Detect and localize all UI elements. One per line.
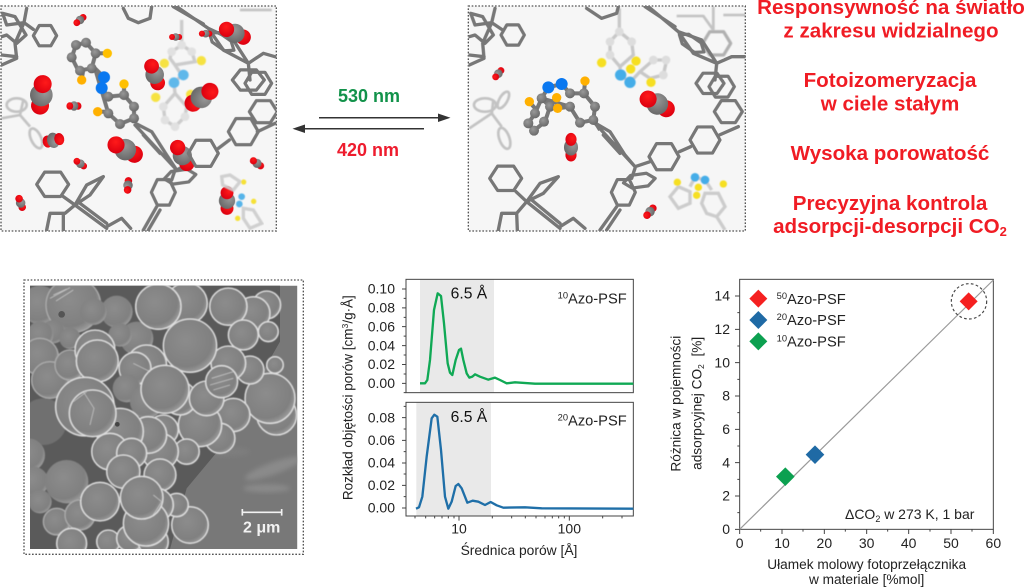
faded small molecule lower right xyxy=(670,173,727,230)
x labels: 10 xyxy=(451,520,467,536)
y labels: 12 xyxy=(714,321,730,337)
faded background framework xyxy=(2,10,272,150)
y labels xyxy=(714,288,730,537)
y title: adsorpcyjnej CO xyxy=(690,369,705,470)
surface details xyxy=(50,288,233,515)
legend: Azo-PSF xyxy=(787,313,846,329)
series labels: 10 xyxy=(558,290,568,300)
blue curve xyxy=(416,415,633,509)
condition note: 2 xyxy=(875,514,880,524)
framework sticks xyxy=(469,7,745,230)
x labels: 10 xyxy=(774,535,790,551)
legend: Azo-PSF xyxy=(787,292,846,308)
x labels xyxy=(451,520,581,536)
label: 420 nm: 420 nm xyxy=(337,140,399,160)
x labels: 100 xyxy=(558,520,581,536)
trend line xyxy=(740,280,993,529)
y labels: 0 xyxy=(722,521,730,537)
faded azo molecule xyxy=(151,20,206,131)
feature: high porosity: Wysoka porowatość xyxy=(791,142,989,165)
azo switch molecule xyxy=(67,38,139,129)
highlight circle xyxy=(951,284,987,319)
axis frames and ticks xyxy=(402,279,633,521)
data point: 50Azo-PSF xyxy=(960,292,978,310)
feature list text xyxy=(757,0,1024,239)
shaded regions xyxy=(416,279,494,516)
legend: 10 xyxy=(777,333,787,343)
dark interior xyxy=(30,286,280,549)
peak labels: 6.5 Å xyxy=(451,407,488,426)
feature: solid-state photoisomerization: w ciele stałym xyxy=(820,93,959,116)
y title xyxy=(669,336,706,472)
chart: pore size distributions xyxy=(340,279,633,558)
green curve xyxy=(420,293,633,384)
y title: Rozkład objętości porów [cm xyxy=(340,329,355,500)
y labels: 0.06 xyxy=(368,318,395,334)
series labels: 20 xyxy=(558,413,568,423)
azo switch molecule xyxy=(523,76,600,136)
data point: 10Azo-PSF xyxy=(776,467,795,486)
y title: 2 xyxy=(696,364,706,369)
y labels: 0.08 xyxy=(368,409,395,425)
panel: left molecular structure with azo switch in trans state xyxy=(1,6,277,231)
x title: Średnica porów [Å] xyxy=(461,541,577,558)
data point: 20Azo-PSF xyxy=(806,445,824,464)
y labels: 2 xyxy=(722,488,730,504)
y labels: 0.06 xyxy=(368,432,395,448)
feature: CO2 control: Precyzyjna kontrola xyxy=(793,192,987,215)
series labels xyxy=(558,290,627,430)
faded background framework xyxy=(469,7,745,150)
y labels: 0.00 xyxy=(368,500,395,516)
framework sticks xyxy=(2,7,277,230)
faded azo molecule xyxy=(597,8,670,88)
y labels: 14 xyxy=(714,288,730,304)
label: 530 nm: 530 nm xyxy=(338,86,400,106)
scale bar xyxy=(242,509,282,537)
panel: SEM micrograph xyxy=(12,278,304,558)
series labels: Azo-PSF xyxy=(568,414,627,430)
y title: 3 xyxy=(340,324,350,329)
feature: CO2 control: 2 xyxy=(1000,224,1007,239)
feature: CO2 control: adsorpcji-desorpcji CO xyxy=(773,215,1000,238)
x labels xyxy=(736,535,1001,551)
y labels: 0.08 xyxy=(368,299,395,315)
arrow: backward xyxy=(292,124,424,133)
y title: [%] xyxy=(690,337,705,364)
series labels: Azo-PSF xyxy=(568,291,627,307)
y labels: 8 xyxy=(722,388,730,404)
legend: Azo-PSF xyxy=(787,334,846,350)
x labels: 30 xyxy=(859,535,875,551)
chart: CO2 capacity difference vs photoswitch fraction xyxy=(669,279,1001,587)
peak labels: 6.5 Å xyxy=(451,283,488,302)
legend: 20 xyxy=(777,312,787,322)
x labels: 60 xyxy=(986,535,1001,551)
CO2 molecules xyxy=(13,12,266,215)
substrate light bands xyxy=(246,455,298,492)
y title: Różnica w pojemności xyxy=(669,336,684,472)
y labels: 6 xyxy=(722,421,730,437)
spheres xyxy=(30,286,298,549)
legend xyxy=(749,290,846,350)
condition note: w 273 K, 1 bar xyxy=(880,506,975,522)
x labels: 50 xyxy=(943,535,959,551)
feature: light response: z zakresu widzialnego xyxy=(783,20,999,43)
y labels: 0.02 xyxy=(368,356,395,372)
feature: solid-state photoisomerization: Fotoizomeryzacja xyxy=(804,69,976,92)
y labels: 0.00 xyxy=(368,375,395,391)
x title: w materiale [%mol] xyxy=(808,572,924,587)
x labels: 20 xyxy=(817,535,832,551)
x labels: 0 xyxy=(736,535,744,551)
peak labels xyxy=(451,283,488,426)
y labels: 0.10 xyxy=(368,281,395,297)
x title: Ułamek molowy fotoprzełącznika xyxy=(767,557,966,572)
y title: /g·Å] xyxy=(340,295,355,324)
y labels xyxy=(368,281,395,516)
y labels: 4 xyxy=(722,454,730,470)
condition note: ΔCO xyxy=(845,506,875,522)
axes xyxy=(735,279,993,534)
faded small molecule lower right xyxy=(222,175,262,228)
panel: right molecular structure with azo switch in cis state xyxy=(468,6,745,231)
CO2 molecules xyxy=(490,65,679,221)
hexagon over CO2 xyxy=(188,140,218,166)
y labels: 0.04 xyxy=(368,337,395,353)
x title xyxy=(767,557,966,587)
y labels: 0.04 xyxy=(368,455,395,471)
scale bar: 2 μm xyxy=(243,520,280,537)
arrows and wavelength labels xyxy=(292,86,450,160)
legend: 50 xyxy=(777,291,787,301)
y labels: 10 xyxy=(714,354,730,370)
x labels: 40 xyxy=(901,535,917,551)
arrow: forward xyxy=(319,114,450,122)
y labels: 0.02 xyxy=(368,477,395,493)
